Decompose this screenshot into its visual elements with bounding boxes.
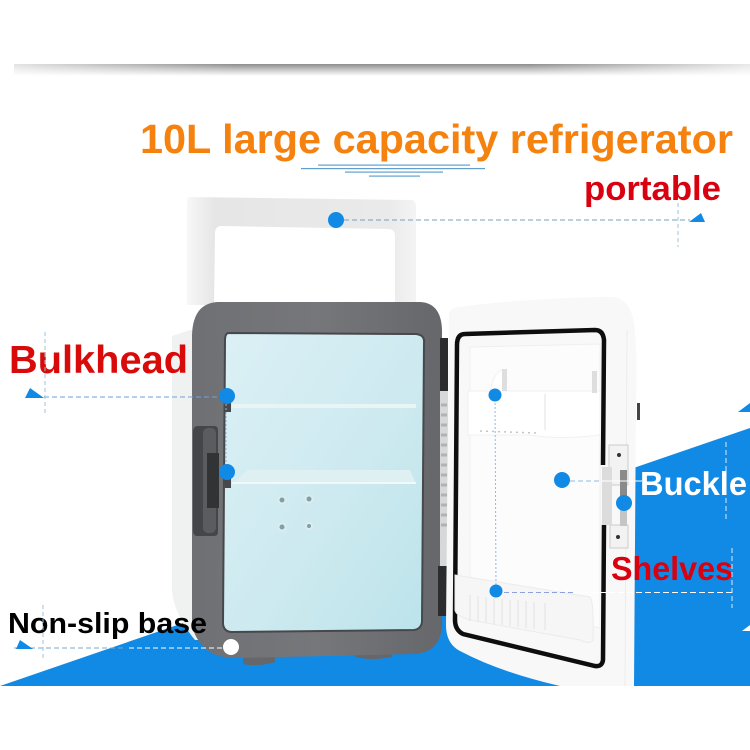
glass window — [223, 333, 424, 632]
lower door shelf — [455, 575, 593, 642]
inner liner — [470, 344, 600, 628]
back body — [172, 330, 200, 640]
hinges and vent — [440, 338, 448, 391]
callout: bulkhead — [9, 332, 235, 480]
feet — [243, 650, 392, 665]
shelf clips — [225, 402, 231, 412]
callout: non-slip base: Non-slip base — [8, 608, 207, 640]
callout: bulkhead: Bulkhead — [9, 339, 188, 382]
title: 10L large capacity refrigerator — [140, 116, 733, 162]
blue background shape — [0, 403, 750, 686]
callout: buckle — [554, 442, 747, 520]
upper door shelf — [468, 369, 600, 438]
callout: shelves: Shelves — [611, 550, 733, 587]
door handle — [193, 426, 218, 536]
callout: shelves — [488, 388, 733, 608]
callout: portable — [328, 170, 721, 247]
carry handle — [187, 197, 416, 305]
tiny caption lines — [301, 164, 485, 177]
right door — [446, 297, 640, 686]
door frame — [192, 302, 442, 658]
side button — [637, 403, 640, 420]
callout: non-slip base — [8, 605, 239, 658]
left door — [192, 302, 448, 665]
fridge illustration: body and handle — [172, 197, 416, 640]
callout: buckle: Buckle — [640, 465, 747, 502]
black gasket — [455, 330, 604, 666]
callout: portable: portable — [584, 170, 721, 208]
buckle latch — [602, 445, 628, 548]
shelves — [232, 404, 416, 408]
grey shadow bar — [14, 64, 750, 76]
door panel — [446, 297, 637, 686]
screws — [278, 496, 312, 530]
